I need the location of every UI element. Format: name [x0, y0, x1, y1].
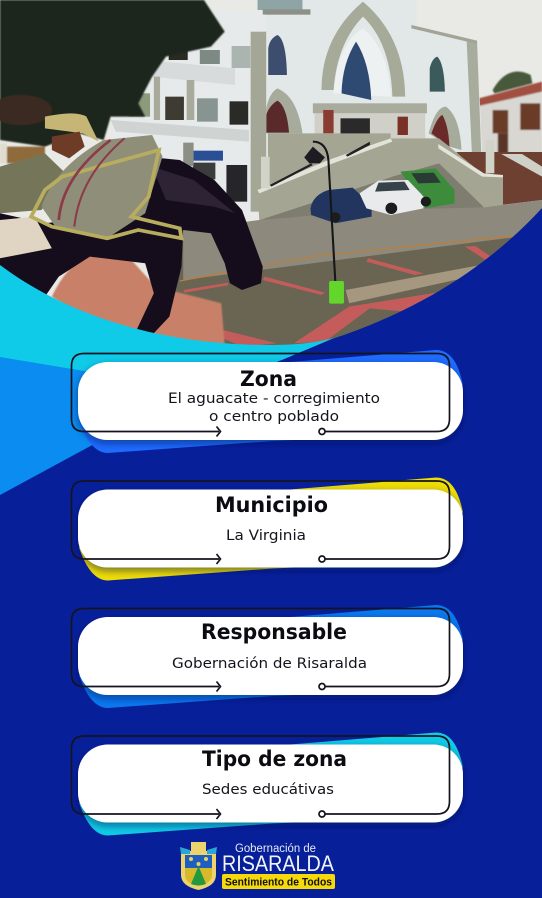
photo: stairs and retaining walls — [258, 133, 542, 220]
card accent: yellow — [79, 478, 463, 580]
card value: La Virginia — [226, 528, 306, 544]
logo tagline badge: Sentimiento de Todos — [225, 876, 332, 888]
icon: coat of arms shield — [180, 842, 217, 890]
card accent: cyan — [79, 732, 463, 836]
card heading: Tipo de zona — [202, 747, 347, 772]
card: Tipo de zona — [72, 732, 463, 836]
card body — [78, 490, 463, 568]
photo: road and cobblestones — [173, 200, 542, 360]
card value: Sedes educátivas — [202, 782, 334, 798]
card body — [78, 744, 463, 822]
light blue wave — [0, 355, 120, 495]
photo: church square with mule statue — [0, 0, 542, 360]
card: Responsable — [72, 605, 463, 708]
cyan wave — [0, 265, 334, 372]
card outline with arrow and dot — [72, 481, 450, 564]
card value: Gobernación de Risaralda — [172, 656, 367, 672]
card heading: Zona — [240, 367, 297, 392]
card: Municipio — [72, 478, 463, 580]
card accent: mid blue — [79, 605, 463, 708]
card outline with arrow and dot — [72, 608, 450, 692]
card outline with arrow and dot — [72, 736, 450, 819]
card value: El aguacate - corregimiento — [168, 391, 380, 407]
logo: Gobernación de Risaralda — [180, 842, 335, 890]
photo: tree — [0, 0, 225, 163]
logo text: RISARALDA: RISARALDA — [222, 851, 334, 876]
photo: white apartment building — [111, 7, 266, 213]
photo: parked cars — [310, 168, 455, 223]
card body — [78, 362, 463, 440]
photo: statue rock base — [52, 253, 225, 347]
navy curved wedge — [277, 208, 542, 362]
card value — [168, 391, 380, 425]
card heading: Municipio — [215, 493, 328, 518]
card heading: Responsable — [201, 620, 347, 645]
logo text: Gobernación de: Gobernación de — [235, 843, 316, 855]
card value: o centro poblado — [209, 409, 339, 425]
photo: lamp post — [304, 142, 344, 304]
photo: right colonial house — [479, 71, 542, 157]
photo: rider and cargo sacks — [0, 113, 181, 258]
photo: white church facade — [258, 0, 482, 153]
card body — [78, 617, 463, 695]
photo: mule statue — [0, 157, 263, 335]
card outline with arrow and dot — [72, 354, 450, 436]
card: Zona — [72, 350, 463, 453]
card accent: blue — [79, 350, 463, 453]
